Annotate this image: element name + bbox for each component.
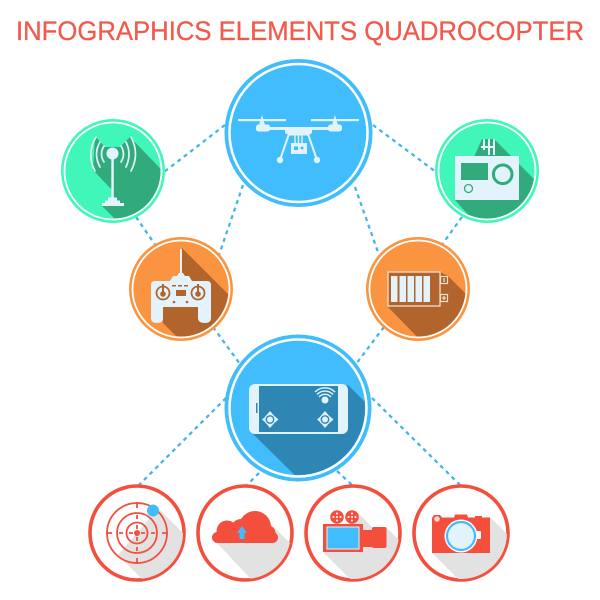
icon: radar target (106, 502, 168, 564)
icon: left direction pad (262, 411, 278, 428)
panel: battery (366, 237, 470, 341)
panel: action camera (435, 119, 539, 223)
icon: upload arrow (237, 526, 247, 539)
shadow: action camera (455, 139, 534, 218)
icon: remote controller (151, 249, 211, 323)
icon: photo camera (432, 514, 490, 553)
panel: video camera (304, 484, 402, 582)
icon: action camera (455, 139, 519, 200)
icon: quadrocopter (238, 115, 359, 163)
panel: cloud upload (196, 484, 294, 582)
icon: battery (388, 272, 448, 306)
icon: antenna tower (91, 137, 136, 206)
icon: right direction pad (317, 411, 334, 428)
icon: wifi signal (315, 388, 335, 404)
panel: antenna (61, 119, 165, 223)
panel: drone (224, 59, 372, 207)
dashed connector lines (136, 125, 462, 485)
shadow: photo camera (432, 517, 507, 579)
shadow: smartphone (253, 385, 365, 475)
title: INFOGRAPHICS ELEMENTS QUADROCOPTER (16, 16, 584, 46)
shadow: radar (118, 509, 183, 579)
panel: radar (88, 484, 186, 582)
icon: cloud (212, 511, 278, 543)
shadow: battery (387, 272, 466, 336)
panel: smartphone app (224, 334, 372, 482)
shadow: remote controller (163, 248, 228, 336)
shadow: antenna (93, 136, 160, 218)
shadow: video camera (323, 513, 398, 579)
icon: smartphone (249, 384, 348, 434)
panel: remote controller (129, 237, 233, 341)
icon: movie camera (323, 510, 386, 552)
shadow: cloud (217, 524, 290, 579)
panel: photo camera (412, 484, 510, 582)
